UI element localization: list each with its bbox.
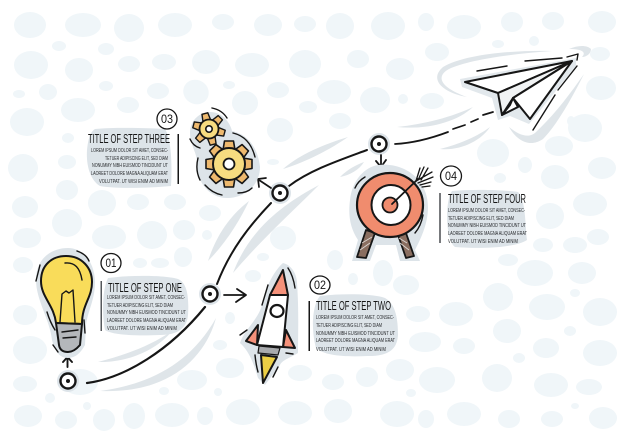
node 3: [269, 182, 291, 204]
panel: step three: [87, 109, 179, 188]
arrow: node 4 to target: [376, 155, 386, 167]
arrow: node 1 to bulb: [63, 357, 72, 367]
badge 03: 03: [161, 112, 173, 126]
text block: step one: LAOREET DOLORE MAGNA ALIQUAM ERAT: [107, 318, 186, 324]
text block: step two: LAOREET DOLORE MAGNA ALIQUAM ERAT: [316, 338, 395, 344]
heading: step two: TITLE OF STEP TWO: [316, 299, 391, 313]
heading: step four: TITLE OF STEP FOUR: [448, 192, 526, 206]
text block: step four: VOLUTPAT. UT WISI ENIM AD MINIM: [448, 239, 518, 245]
icon: rocket: [240, 263, 298, 385]
text block: step four: LAOREET DOLORE MAGNA ALIQUAM ERAT: [448, 231, 527, 237]
text block: step four: [448, 208, 527, 245]
heading: step three: TITLE OF STEP THREE: [88, 132, 170, 146]
text block: step two: NONUMMY NIBH EUISMOD TINCIDUNT UT: [316, 331, 395, 337]
text block: step one: VOLUTPAT. UT WISI ENIM AD MINIM: [107, 326, 177, 332]
text block: step three: VOLUTPAT. UT WISI ENIM AD MINIM: [99, 179, 168, 185]
text block: step three: LOREM IPSUM DOLOR SIT AMET, CONSEC-: [91, 148, 168, 154]
badge 01: 01: [106, 256, 117, 270]
text block: step three: LAOREET DOLORE MAGNA ALIQUAM ERAT: [91, 171, 168, 177]
large gear: [206, 141, 252, 187]
text block: step two: TETUER ADIPISCING ELIT, SED DIAM: [316, 323, 382, 329]
node 4: [368, 133, 390, 155]
text block: step four: TETUER ADIPISCING ELIT, SED DIAM: [448, 216, 514, 222]
heading: step one: TITLE OF STEP ONE: [108, 281, 182, 295]
node 1: [57, 370, 79, 392]
panel: step four: [439, 166, 527, 248]
arrow: node 2 to rocket: [224, 289, 246, 302]
text block: step two: [316, 315, 395, 353]
text block: step one: LOREM IPSUM DOLOR SIT AMET, CONSEC-: [107, 295, 185, 301]
text block: step one: [107, 295, 186, 332]
text block: step four: NONUMMY NIBH EUISMOD TINCIDUNT UT: [448, 223, 526, 229]
text block: step two: VOLUTPAT. UT WISI ENIM AD MINIM: [316, 347, 386, 353]
node 2: [199, 283, 221, 305]
motion swooshes under the path: [98, 46, 591, 391]
text block: step three: NONUMMY NIBH EUISMOD TINCIDUNT UT: [92, 163, 168, 169]
text block: step three: TETUER ADIPISCING ELIT, SED DIAM: [105, 156, 168, 162]
icon: target: [349, 165, 433, 261]
panel: step one: [100, 254, 188, 335]
icon: light bulb: [36, 248, 95, 358]
text block: step one: NONUMMY NIBH EUISMOD TINCIDUNT UT: [107, 310, 186, 316]
panel: step two: [308, 276, 398, 356]
text block: step one: TETUER ADIPISCING ELIT, SED DIAM: [107, 303, 173, 309]
icon: gears: [190, 108, 260, 198]
main dashed journey path: [87, 112, 493, 383]
text block: step four: LOREM IPSUM DOLOR SIT AMET, CONSEC-: [448, 208, 525, 214]
badge 04: 04: [445, 169, 457, 183]
badge 02: 02: [314, 278, 326, 292]
arrow: node 3 to gears: [258, 178, 271, 188]
text block: step three: [91, 148, 168, 185]
icon: paper plane: [460, 54, 578, 130]
text block: step two: LOREM IPSUM DOLOR SIT AMET, CONSEC-: [316, 315, 394, 321]
small gear: [193, 113, 225, 145]
